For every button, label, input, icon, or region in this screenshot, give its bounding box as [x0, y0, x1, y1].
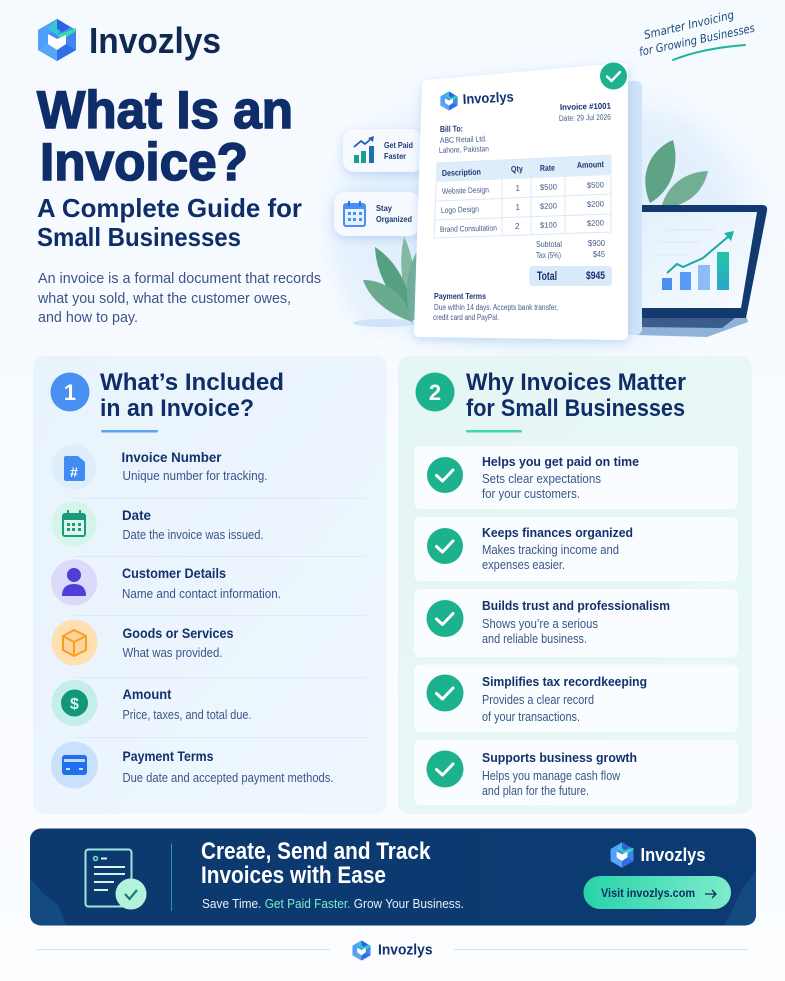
bill to: ABC Retail Ltd. [440, 134, 487, 145]
card: tax: Simplifies tax recordkeeping [482, 674, 647, 689]
totals: $45 [593, 250, 605, 259]
line items table: Description [442, 167, 481, 178]
call-to-action banner [30, 828, 756, 926]
tagline callout: for Growing Businesses [638, 21, 756, 59]
feature pill: stay organized [334, 192, 420, 236]
plant: left [353, 237, 418, 327]
banner headline: Invoices with Ease [201, 862, 386, 889]
line items table: Rate [540, 162, 555, 173]
invoice back sheet [600, 81, 642, 335]
line items table: $500 [540, 182, 558, 192]
line items table: Qty [511, 164, 523, 174]
plant: right [645, 140, 708, 208]
card: trust: Shows you’re a serious [482, 617, 598, 631]
intro paragraph: An invoice is a formal document that records [38, 270, 321, 287]
card: paid on time: Sets clear expectations [482, 472, 601, 486]
brand logo: Invozlys [89, 20, 221, 61]
feature pill: get paid faster: Get Paid [384, 140, 413, 150]
line items table: $200 [587, 199, 605, 209]
totals: $945 [586, 270, 605, 282]
intro paragraph [37, 270, 321, 326]
item: goods or services: What was provided. [122, 646, 222, 660]
item: amount: Price, taxes, and total due. [122, 708, 252, 722]
item: date: Date [122, 507, 151, 523]
item: customer details [51, 560, 281, 606]
card: tax [414, 664, 738, 732]
totals: Subtotal [536, 240, 562, 249]
card: growth: Supports business growth [482, 750, 637, 765]
totals [529, 239, 612, 286]
feature pill: get paid faster [343, 129, 423, 172]
panel: why invoices matter [398, 356, 752, 814]
line items table: 1 [516, 184, 520, 193]
section number 1 [50, 372, 90, 412]
totals: Total [537, 269, 557, 283]
card: finances organized: Makes tracking income and [482, 543, 619, 557]
line items table: Amount [577, 159, 604, 170]
invoice meta [559, 101, 611, 123]
payment terms: Due within 14 days. Accepts bank transfer, [434, 303, 558, 312]
item: amount: $ [70, 696, 79, 713]
line items table: $500 [587, 180, 605, 190]
payment terms [433, 292, 558, 322]
line items table: Logo Design [441, 205, 479, 215]
item: amount [52, 680, 252, 726]
invoice document [414, 63, 628, 340]
section heading 2: for Small Businesses [466, 395, 685, 422]
item: payment terms: Due date and accepted payment methods. [122, 771, 334, 785]
item: date [52, 502, 264, 546]
totals: Tax (5%) [536, 251, 561, 260]
item: invoice number: Invoice Number [122, 449, 222, 465]
title: Invoice? [40, 133, 248, 192]
title [37, 81, 293, 192]
item: payment terms: Payment Terms [122, 748, 214, 764]
section heading 2: Why Invoices Matter [466, 369, 686, 396]
card: trust: and reliable business. [482, 632, 587, 646]
invoice meta: Date: 29 Jul 2026 [559, 113, 611, 123]
banner subline: Save Time. Get Paid Faster. Grow Your Business. [202, 896, 464, 911]
payment terms: Payment Terms [434, 292, 486, 301]
section heading 2 [466, 369, 686, 432]
line items table: $100 [540, 221, 558, 230]
totals: $900 [588, 239, 606, 248]
line items table: 2 [515, 222, 520, 231]
banner headline: Create, Send and Track [201, 838, 431, 865]
line items table: Website Design [442, 185, 489, 196]
hero glow [333, 95, 750, 345]
item: amount: Amount [122, 686, 172, 702]
card: growth: and plan for the future. [482, 784, 589, 798]
item: invoice number: # [70, 464, 78, 480]
item: goods or services: Goods or Services [122, 625, 234, 641]
subtitle: Small Businesses [37, 222, 241, 252]
laptop [637, 205, 767, 337]
item: customer details: Customer Details [122, 565, 226, 581]
card: growth: Helps you manage cash flow [482, 769, 621, 783]
footer logo [352, 941, 432, 960]
item: invoice number: Unique number for tracking. [122, 469, 268, 483]
section heading 1: in an Invoice? [100, 395, 254, 422]
item: invoice number [52, 444, 268, 490]
card: paid on time [414, 446, 738, 509]
line items table: 1 [516, 203, 520, 212]
feature pill: stay organized: Stay [376, 203, 392, 213]
payment terms: credit card and PayPal. [433, 313, 499, 322]
section number 2: 2 [429, 380, 441, 405]
item: goods or services [52, 620, 234, 666]
section number 1: 1 [64, 380, 76, 405]
banner logo: Invozlys [640, 845, 706, 865]
verified badge [600, 62, 627, 90]
line items table: $200 [587, 219, 605, 228]
line items table: $200 [540, 201, 558, 211]
visit button [584, 876, 731, 909]
invoice logo: Invozlys [462, 88, 514, 107]
invoice logo [440, 88, 514, 110]
card: trust: Builds trust and professionalism [482, 598, 670, 613]
card: growth [414, 740, 738, 805]
intro paragraph: what you sold, what the customer owes, [37, 290, 291, 307]
section number 2 [416, 372, 454, 412]
feature pill: get paid faster: Faster [384, 151, 407, 161]
footer logo: Invozlys [378, 942, 432, 958]
tagline callout: Smarter Invoicing [643, 8, 735, 42]
banner logo [611, 842, 706, 868]
card: finances organized: Keeps finances organized [482, 525, 633, 540]
card: finances organized: expenses easier. [482, 558, 565, 572]
banner headline [201, 838, 431, 889]
panel: what's included [33, 356, 387, 814]
bill to: Bill To: [440, 123, 463, 134]
subtitle [37, 193, 302, 252]
intro paragraph: and how to pay. [38, 309, 138, 326]
subtitle: A Complete Guide for [37, 193, 302, 223]
bill to: Lahore, Pakistan [439, 144, 489, 155]
brand logo [38, 19, 221, 61]
item: customer details: Name and contact information. [122, 587, 281, 601]
card: paid on time: Helps you get paid on time [482, 454, 639, 469]
card: trust [414, 589, 738, 657]
card: tax: Provides a clear record [482, 693, 594, 707]
section heading 1: What’s Included [100, 369, 284, 396]
item: payment terms [51, 742, 334, 788]
card: paid on time: for your customers. [482, 487, 580, 501]
item: date: Date the invoice was issued. [122, 528, 264, 542]
bill to [439, 123, 489, 155]
feature pill: stay organized: Organized [376, 214, 412, 224]
line items table [434, 155, 611, 238]
visit button: Visit invozlys.com [601, 886, 695, 900]
document check icon [86, 850, 146, 910]
invoice meta: Invoice #1001 [560, 101, 611, 112]
card: tax: of your transactions. [482, 710, 580, 724]
title: What Is an [37, 81, 293, 140]
card: finances organized [414, 517, 738, 581]
line items table: Brand Consultation [440, 224, 497, 234]
section heading 1 [100, 369, 284, 432]
